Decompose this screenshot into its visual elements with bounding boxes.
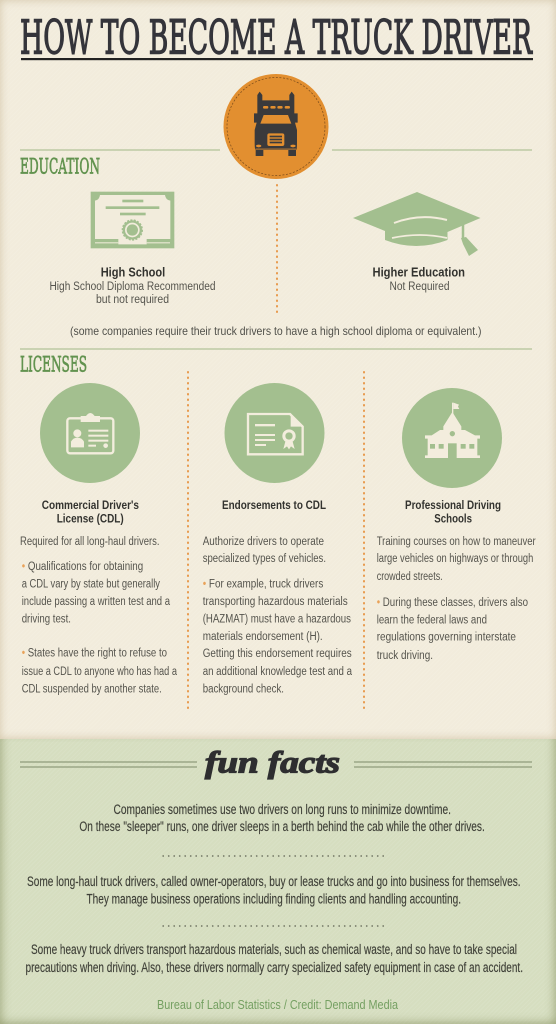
icon: endorsement certificate (224, 383, 324, 483)
column: endorsements to CDL: Authorize drivers to operate (203, 536, 324, 548)
text: education note: (some companies require their truck drivers to have a high school diploma or equivalent.) (70, 324, 482, 338)
icon: truck badge (224, 74, 328, 179)
column: commercial driver's license: Required for all long-haul drivers. (20, 536, 160, 548)
column: professional driving schools: regulations governing interstate (377, 632, 516, 644)
text: fact one: Companies sometimes use two drivers on long runs to minimize downtime. (114, 802, 451, 817)
text: high school: High School Diploma Recommended (50, 281, 216, 293)
column: professional driving schools (377, 498, 536, 662)
column: commercial driver's license: Commercial Driver's (42, 498, 139, 512)
column: professional driving schools: Professional Driving (405, 498, 501, 512)
column: professional driving schools: learn the federal laws and (377, 615, 487, 627)
column: endorsements to CDL: Endorsements to CDL (222, 498, 326, 512)
column: commercial driver's license: issue a CDL to anyone who has had a (22, 666, 177, 678)
panel: fun facts background (0, 739, 556, 1024)
column: endorsements to CDL: (HAZMAT) must have a hazardous (203, 614, 351, 626)
text: high school (50, 264, 216, 306)
column: endorsements to CDL: specialized types of vehicles. (203, 553, 326, 565)
column: endorsements to CDL: background check. (203, 684, 284, 696)
column: commercial driver's license: driving test. (22, 614, 71, 626)
column: commercial driver's license: a CDL vary by state but generally (22, 579, 160, 591)
heading: education: EDUCATION (20, 155, 100, 179)
text: higher education (372, 264, 465, 293)
text: higher education: Not Required (390, 281, 450, 293)
text: fact two (27, 874, 521, 907)
column: commercial driver's license: License (CDL) (57, 512, 124, 526)
icon: license card (40, 383, 140, 483)
column: endorsements to CDL: materials endorsement (H). (203, 631, 323, 643)
column: commercial driver's license: CDL suspended by another state. (22, 684, 162, 696)
column: endorsements to CDL (203, 498, 353, 696)
heading: fun facts: fun facts (205, 744, 340, 780)
column: endorsements to CDL: transporting hazardous materials (203, 596, 348, 608)
column: commercial driver's license (20, 498, 177, 696)
column: endorsements to CDL: an additional knowledge test and a (203, 666, 353, 678)
icon: driving school building (402, 388, 502, 488)
text: high school: but not required (96, 294, 169, 306)
column: commercial driver's license: • States have the right to refuse to (22, 648, 167, 660)
column: endorsements to CDL: • For example, truck drivers (203, 578, 324, 590)
text: fact one (79, 802, 485, 834)
column: professional driving schools: Schools (434, 512, 472, 526)
text: high school: High School (101, 264, 165, 280)
column: commercial driver's license: • Qualifications for obtaining (22, 561, 143, 573)
text: fact three (26, 942, 523, 975)
column: professional driving schools: • During these classes, drivers also (377, 597, 528, 609)
column: commercial driver's license: include passing a written test and a (22, 596, 170, 608)
column: professional driving schools: truck driving. (377, 650, 433, 662)
column: endorsements to CDL: Getting this endorsement requires (203, 648, 352, 660)
text: higher education: Higher Education (372, 264, 465, 280)
column: professional driving schools: crowded streets. (377, 571, 443, 583)
heading: licenses: LICENSES (20, 353, 87, 377)
panel: page background (0, 0, 556, 739)
icon: graduation cap (353, 192, 480, 256)
text: source credit: Bureau of Labor Statistics / Credit: Demand Media (157, 998, 398, 1012)
icon: diploma (91, 192, 174, 248)
